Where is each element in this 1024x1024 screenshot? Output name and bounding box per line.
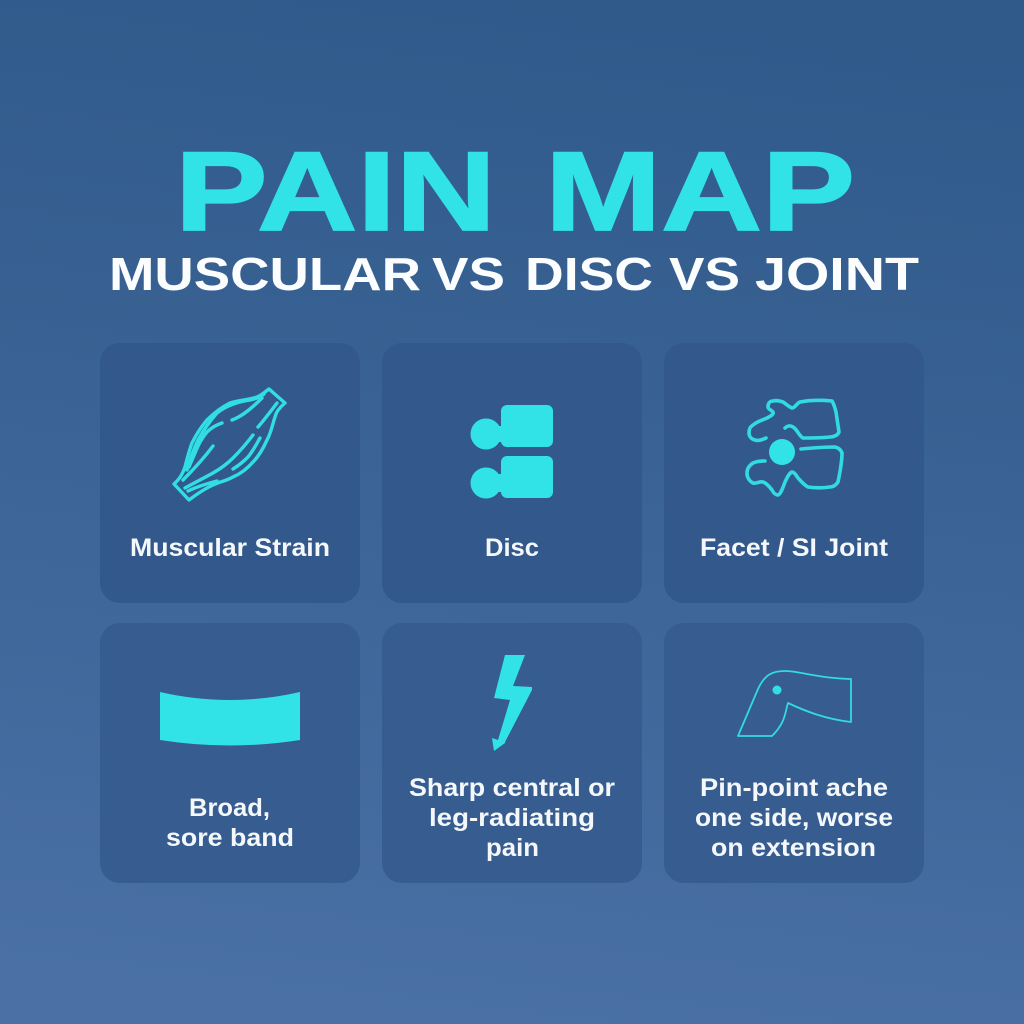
subtitle: VS: [432, 248, 505, 300]
label: sore band: [166, 824, 294, 852]
label: [166, 794, 294, 852]
panel: broad sore band: [100, 623, 360, 883]
label: on extension: [711, 834, 876, 862]
label: Disc: [485, 534, 539, 562]
title: [175, 129, 855, 255]
label: [695, 774, 893, 862]
title: PAIN: [175, 129, 496, 255]
subtitle: DISC: [525, 248, 653, 300]
icon: lightning bolt: [492, 655, 532, 751]
label: [409, 774, 615, 862]
label: Broad,: [189, 794, 270, 822]
panel: pin-point ache: [664, 623, 924, 883]
panel: sharp pain: [382, 623, 642, 883]
icon: muscle: [174, 389, 285, 500]
label: pain: [486, 834, 539, 862]
panel: facet / SI joint: [664, 343, 924, 603]
icon: vertebrae: [747, 400, 842, 495]
icon: band: [160, 692, 300, 746]
panel: disc: [382, 343, 642, 603]
label: Muscular Strain: [130, 534, 330, 562]
subtitle: MUSCULAR: [109, 248, 421, 300]
label: Pin-point ache: [700, 774, 888, 802]
subtitle: [109, 248, 919, 300]
label: leg-radiating: [429, 804, 595, 832]
icon: lower back outline: [738, 671, 851, 736]
title: MAP: [545, 129, 855, 255]
subtitle: VS: [669, 248, 740, 300]
label: Facet / SI Joint: [700, 534, 889, 562]
label: one side, worse: [695, 804, 893, 832]
panel: muscular strain: [100, 343, 360, 603]
icon: discs: [470, 405, 553, 498]
subtitle: JOINT: [755, 248, 919, 300]
label: Sharp central or: [409, 774, 615, 802]
